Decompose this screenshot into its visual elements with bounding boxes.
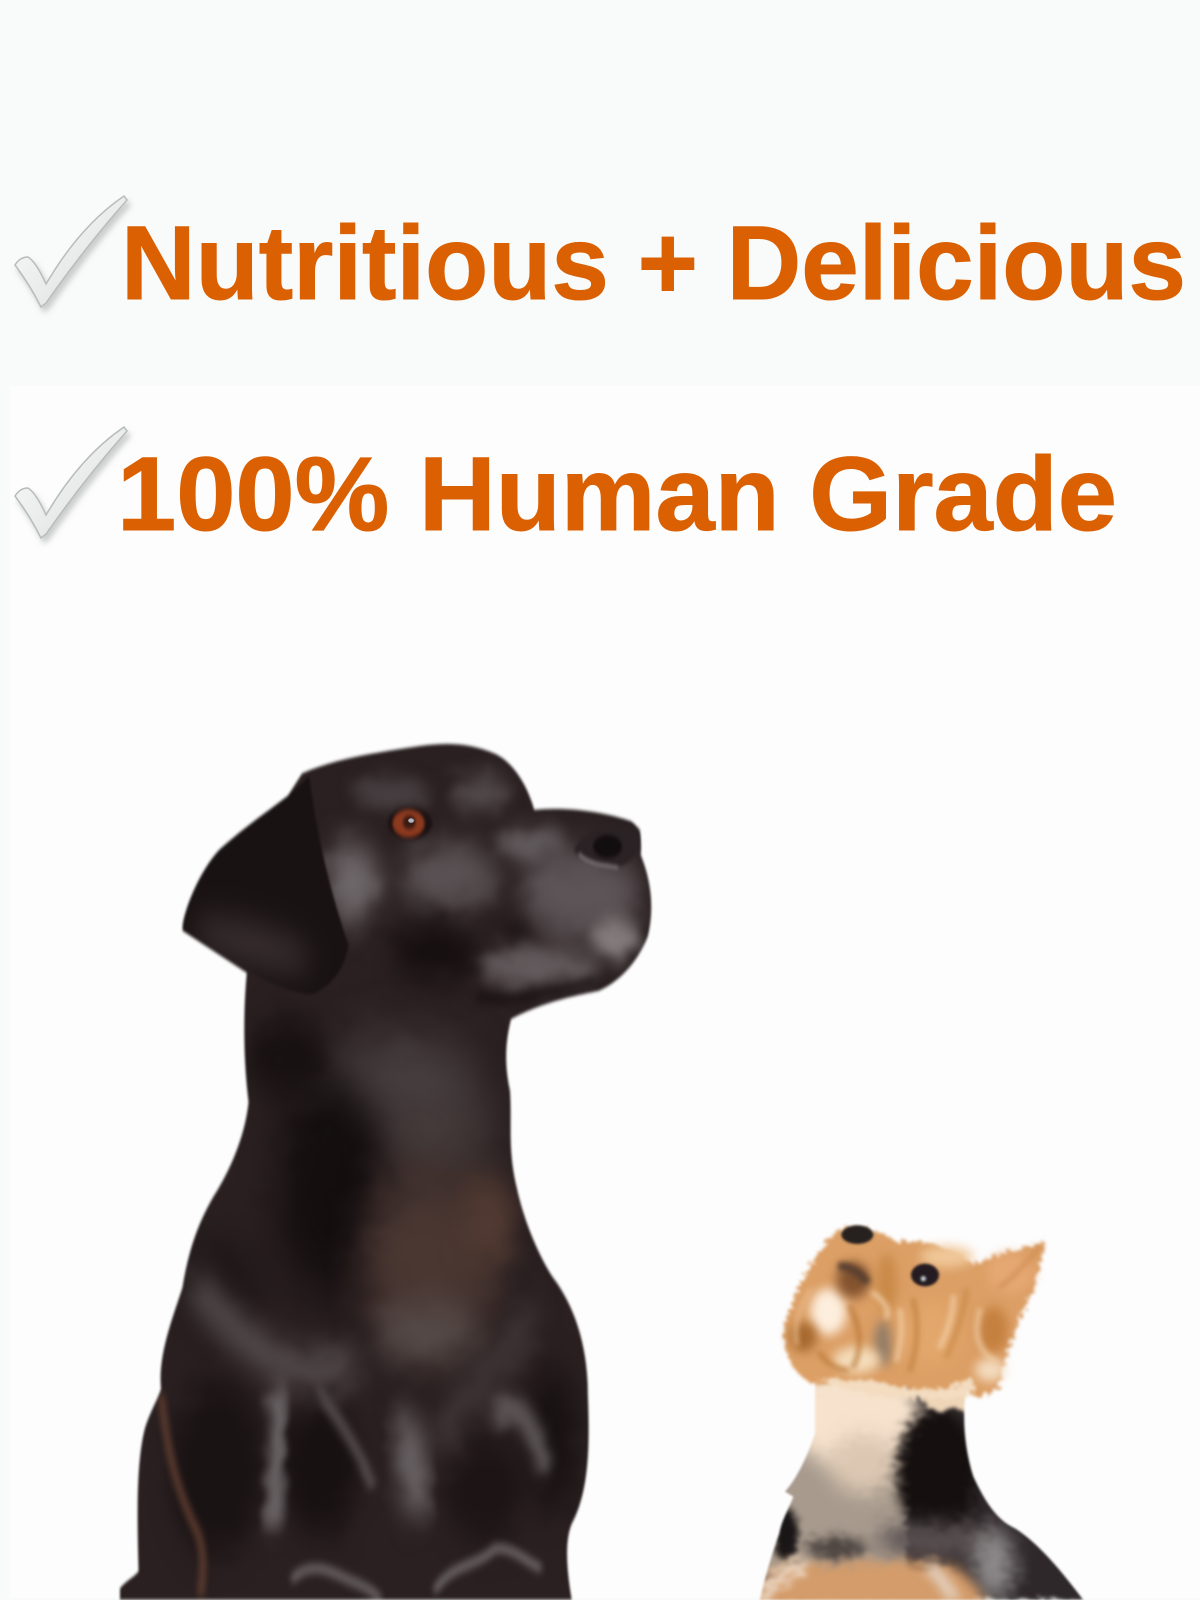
ear: [181, 771, 352, 1001]
body: [759, 1382, 1084, 1600]
heading: 100% Human Grade: 100% Human Grade: [117, 436, 1117, 553]
hair strands: [796, 1247, 1040, 1370]
illustration: yorkshire terrier: [740, 1225, 1100, 1600]
head fur: [783, 1227, 1045, 1399]
eye glint: [408, 818, 414, 823]
heading: Nutritious + Delicious: Nutritious + Delicious: [121, 205, 1186, 322]
nose: [574, 823, 640, 867]
eye: [388, 808, 432, 839]
belly ripple highlights: [291, 1568, 381, 1600]
neck and chest shading: [170, 1018, 577, 1557]
icon: checkmark 2: [15, 427, 127, 538]
eye: [911, 1264, 939, 1286]
icon: checkmark 1: [15, 196, 127, 307]
head highlights: [324, 777, 641, 986]
mouth line: [477, 981, 595, 999]
illustration: black labrador: [120, 720, 680, 1600]
fur tones: [790, 1246, 1040, 1382]
nose: [841, 1225, 873, 1244]
mouth: [838, 1266, 867, 1283]
